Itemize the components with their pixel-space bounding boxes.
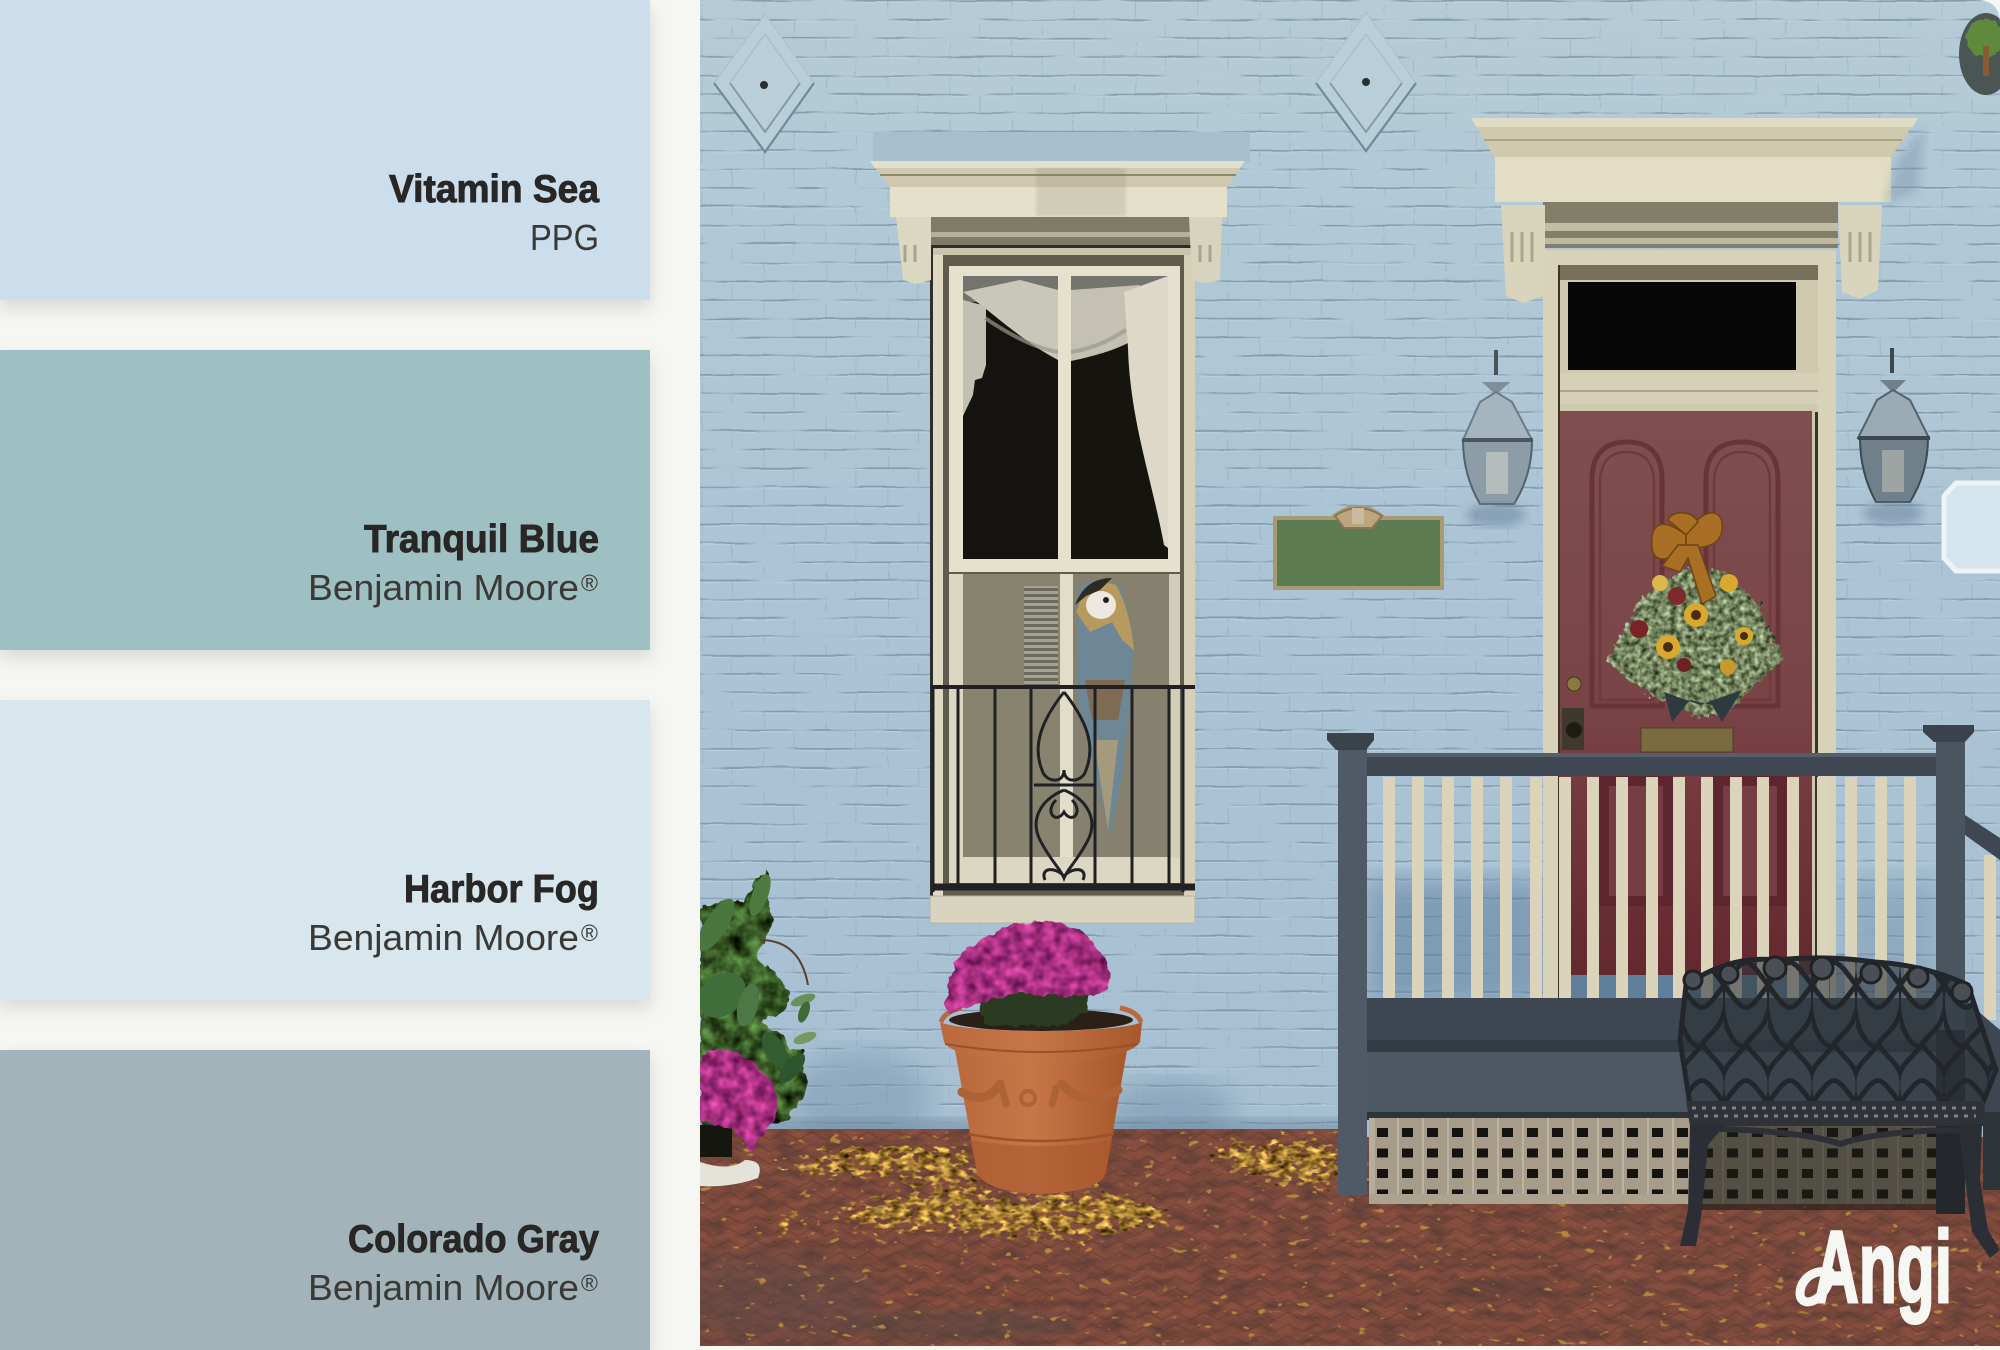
icon: diamond ornament center — [1316, 12, 1416, 151]
scarecrow — [1075, 578, 1134, 835]
icon: tree medallion — [1959, 13, 2000, 95]
door hardware — [1562, 677, 1733, 752]
swatch: Vitamin Sea — [0, 0, 650, 300]
swatch: Harbor Fog: Benjamin Moore — [308, 917, 579, 958]
iron bench — [1680, 957, 2000, 1258]
threshold shadow — [1570, 975, 1830, 1000]
potted pink mums — [945, 921, 1110, 1026]
porch: top rail — [1365, 753, 2000, 860]
window frame casing — [930, 245, 1195, 900]
bench rosettes — [1684, 957, 1972, 1002]
bench legs — [1680, 1124, 1726, 1246]
wall lantern right — [1858, 348, 1930, 525]
swatch: Harbor Fog — [0, 700, 650, 1000]
curtains — [963, 270, 1168, 560]
wreath — [1608, 513, 1784, 722]
arched door panels — [1592, 442, 1778, 706]
door cornice — [1471, 118, 1925, 303]
swatch: Vitamin Sea: PPG — [530, 217, 599, 258]
lower sash — [949, 559, 1180, 883]
terracotta planter — [940, 1008, 1142, 1194]
swatch: Colorado Gray: Benjamin Moore — [308, 1267, 579, 1308]
logo: Angi — [1800, 1210, 1952, 1324]
swatch: Tranquil Blue: Benjamin Moore — [308, 567, 579, 608]
red door — [1560, 411, 1812, 977]
white bag — [700, 1160, 760, 1186]
blue brick wall — [700, 0, 2000, 1150]
upper sash — [949, 266, 1180, 572]
bench seat — [1686, 1101, 1986, 1126]
swatch: Colorado Gray: Colorado Gray — [348, 1218, 599, 1261]
swatch: Tranquil Blue — [0, 350, 650, 650]
small pink mums — [700, 1051, 778, 1157]
icon: diamond ornament left — [714, 14, 814, 152]
wreath sunflowers — [1630, 574, 1753, 675]
swatch: Colorado Gray: ® — [581, 1270, 598, 1296]
swatch: Harbor Fog: Harbor Fog — [404, 868, 599, 911]
wrought iron balcony rail — [931, 686, 1195, 892]
window — [870, 132, 1250, 923]
porch: lattice skirting — [1369, 1118, 1940, 1210]
panel: color swatches — [0, 0, 650, 1350]
swatch: Colorado Gray — [0, 1050, 650, 1350]
wall lantern left — [1462, 350, 1533, 527]
lower door panels — [1599, 776, 1787, 906]
swatch: Harbor Fog: ® — [581, 920, 598, 946]
porch: right post — [1923, 725, 1974, 1214]
wreath bow — [1652, 513, 1722, 604]
porch: stoop box — [1365, 998, 2000, 1190]
swatch: Tranquil Blue: ® — [581, 570, 598, 596]
swatch: Tranquil Blue: Tranquil Blue — [364, 518, 599, 561]
planter garland relief — [962, 1084, 1118, 1105]
upper wall band — [873, 132, 1250, 162]
window cornice — [870, 161, 1245, 284]
fallen leaves piles — [760, 1137, 1340, 1241]
window sill — [930, 896, 1195, 923]
green plaque — [1273, 505, 1444, 590]
ground: brick pavers — [660, 1129, 2000, 1346]
white wall plate — [1944, 483, 2000, 571]
porch: left post — [1327, 733, 1374, 1195]
green shrub — [689, 872, 818, 1135]
door surround — [1543, 250, 1836, 1000]
swatch: Vitamin Sea: Vitamin Sea — [389, 168, 599, 211]
panel: house photo — [660, 0, 2000, 1346]
transom window — [1568, 282, 1796, 370]
porch: balusters — [1383, 777, 1996, 1020]
